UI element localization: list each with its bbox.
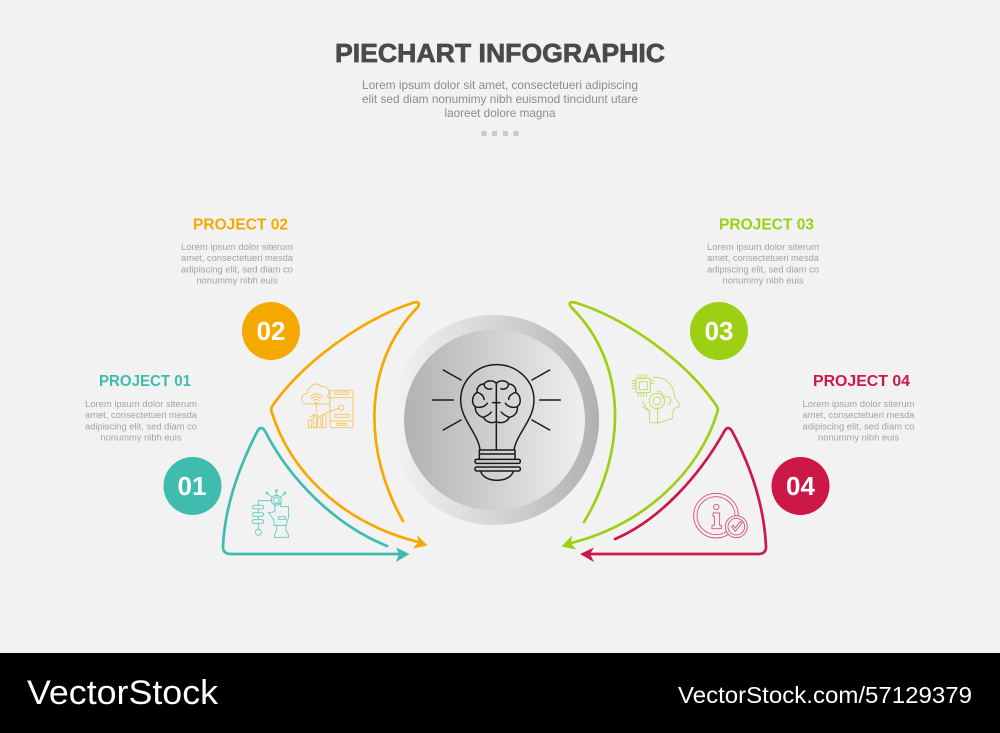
arrow segment: project 03 green xyxy=(562,302,718,550)
text: project 04 description: Lorem ipsum dolor siterum xyxy=(802,399,914,410)
intro text block: elit sed diam nonumimy nibh euismod tincidunt utare xyxy=(362,92,638,106)
text: project 04 description: adipiscing elit, sed diam co xyxy=(802,422,914,432)
heading: project 03: PROJECT 03 xyxy=(719,216,814,234)
arrow segment: project 01 teal xyxy=(223,428,410,562)
text: project 04 description: amet, consectetueri mesda xyxy=(802,410,915,421)
text: project 02 description xyxy=(181,242,294,286)
intro text block: Lorem ipsum dolor sit amet, consectetueri adipiscing xyxy=(362,78,638,92)
title dots xyxy=(482,131,518,136)
intro text block xyxy=(362,78,638,120)
text: project 01 description xyxy=(85,399,198,444)
text: project 01 description: amet, consectetueri mesda xyxy=(85,410,198,421)
text: project 02 description: amet, consectetueri mesda xyxy=(181,253,294,264)
text: project 03 description: Lorem ipsum dolor siterum xyxy=(707,242,819,253)
title: PIECHART INFOGRAPHIC xyxy=(335,38,665,68)
number badge 03: 03 xyxy=(705,316,733,346)
text: project 03 description xyxy=(707,242,820,286)
text: project 02 description: adipiscing elit, sed diam co xyxy=(181,264,293,276)
text: project 03 description: adipiscing elit, sed diam co xyxy=(707,264,819,276)
text: project 01 description: adipiscing elit, sed diam co xyxy=(85,422,197,432)
number badge 03 xyxy=(690,302,748,360)
icon: light bulb with brain xyxy=(433,365,560,480)
text: project 03 description: amet, consectetueri mesda xyxy=(707,253,820,264)
number badge 02: 02 xyxy=(257,316,285,346)
heading: project 04: PROJECT 04 xyxy=(813,373,910,390)
text: project 02 description: Lorem ipsum dolor siterum xyxy=(181,242,293,253)
number badge 02 xyxy=(242,302,300,360)
panel: project 03 xyxy=(690,216,820,360)
text: project 01 description: nonummy nibh euis xyxy=(100,432,182,444)
number badge 04: 04 xyxy=(786,471,815,501)
text: project 03 description: nonummy nibh euis xyxy=(722,276,804,286)
heading: project 02: PROJECT 02 xyxy=(193,216,288,234)
text: project 04 description xyxy=(802,399,915,444)
arrow segment: project 04 red xyxy=(580,428,766,562)
intro text block: laoreet dolore magna xyxy=(444,106,556,120)
icon: cloud, chart and phone xyxy=(302,384,353,428)
icon: robot hand flowchart xyxy=(252,490,289,537)
icon: AI head with chip xyxy=(632,374,680,423)
footer logo text: VectorStock xyxy=(27,674,219,712)
number badge 01 xyxy=(164,457,222,515)
number badge 04 xyxy=(772,457,830,515)
number badge 01: 01 xyxy=(178,471,206,501)
icon: info check badge xyxy=(694,493,747,538)
panel: project 01 xyxy=(85,373,222,515)
footer url: VectorStock.com/57129379 xyxy=(678,682,972,708)
central circle xyxy=(389,315,599,525)
text: project 04 description: nonummy nibh euis xyxy=(818,432,899,444)
panel: project 02 xyxy=(181,216,300,360)
text: project 01 description: Lorem ipsum dolor siterum xyxy=(85,399,197,410)
heading: project 01: PROJECT 01 xyxy=(99,373,191,390)
panel: project 04 xyxy=(772,373,915,515)
arrow segment: project 02 orange xyxy=(271,302,428,548)
text: project 02 description: nonummy nibh euis xyxy=(196,276,278,286)
footer bar xyxy=(0,653,1000,733)
